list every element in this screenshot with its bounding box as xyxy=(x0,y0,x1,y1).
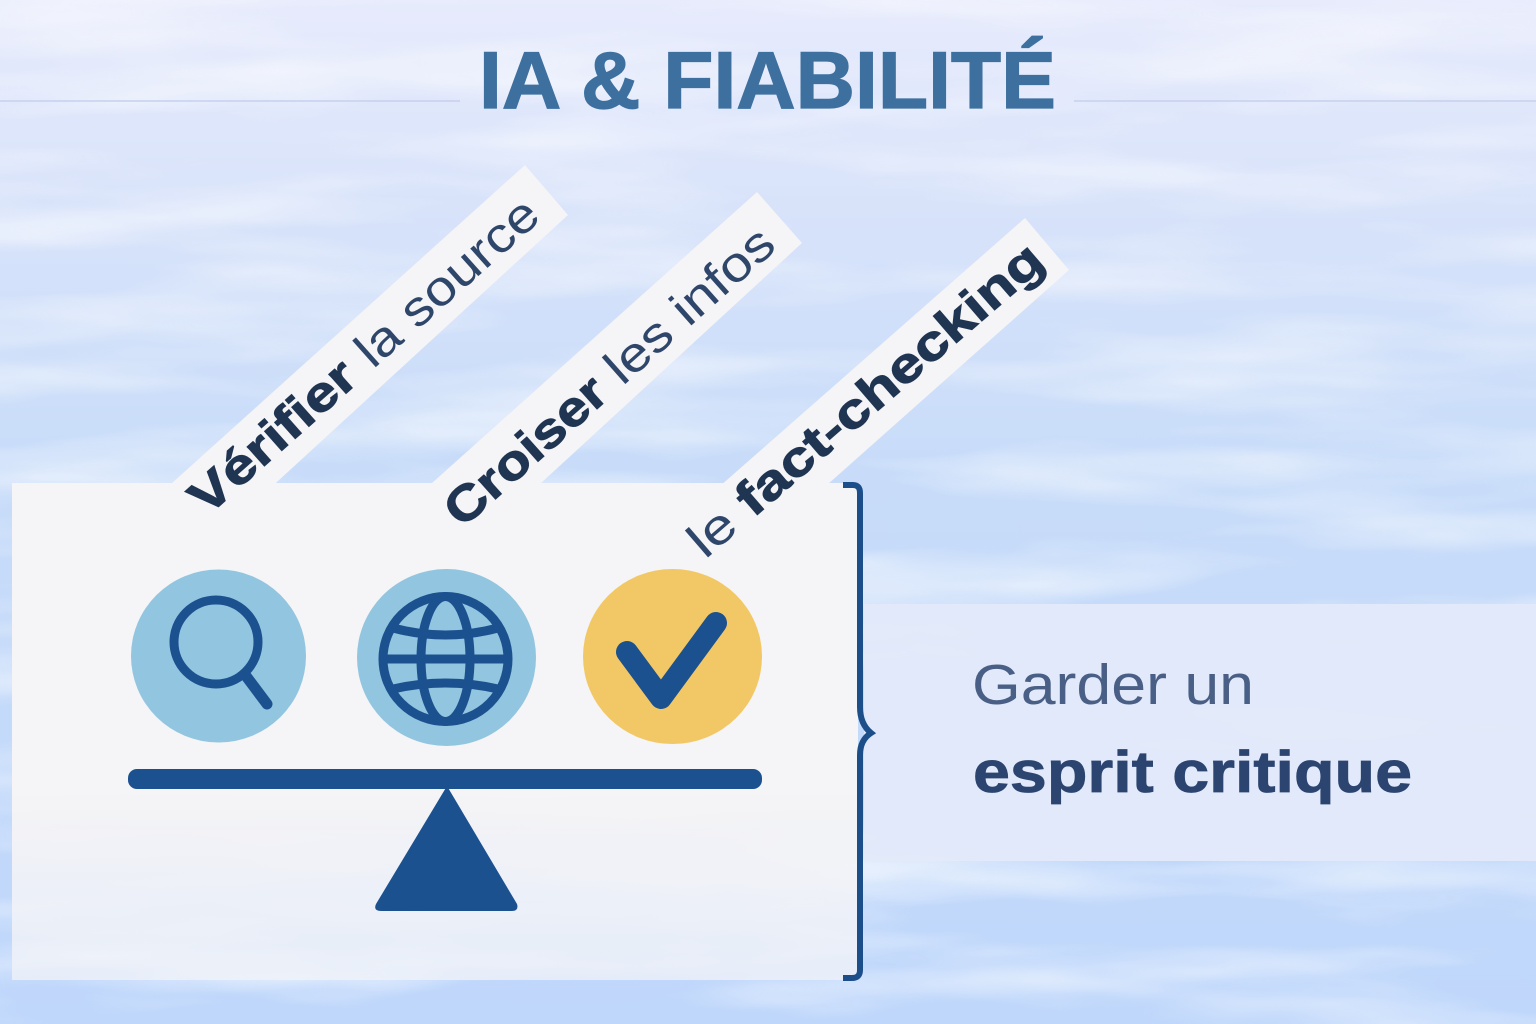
balance fulcrum xyxy=(375,786,517,911)
panel: balance of checks xyxy=(12,165,1069,980)
text: esprit critique: esprit critique xyxy=(973,740,1412,805)
band: le fact-checking xyxy=(670,218,1069,580)
balance beam xyxy=(128,769,762,789)
text: garder un: Garder un xyxy=(972,653,1254,717)
band: vérifier la source: Vérifier xyxy=(178,349,368,525)
title: IA & FIABILITÉ xyxy=(479,35,1056,126)
band: vérifier la source xyxy=(172,165,568,525)
icon: globe xyxy=(357,569,536,746)
icon: check mark xyxy=(583,569,762,744)
band: croiser les infos: Croiser les infos xyxy=(433,216,786,537)
brace xyxy=(843,485,871,978)
band: vérifier la source: la source xyxy=(344,187,550,378)
band: le fact-checking: le fact-checking xyxy=(677,232,1054,568)
icon: magnifying glass xyxy=(131,570,306,742)
panel: conclusion xyxy=(864,604,1536,861)
